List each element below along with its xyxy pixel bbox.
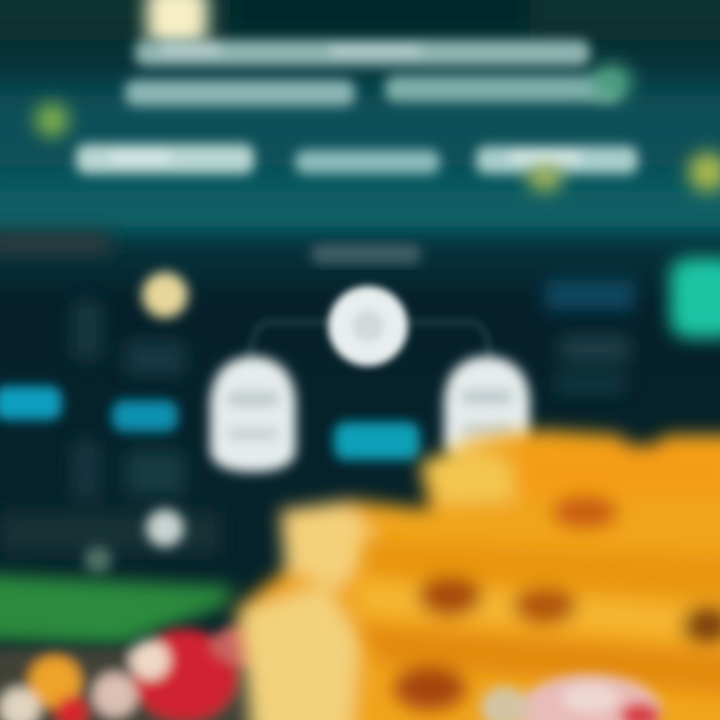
- header glow band: [0, 0, 720, 226]
- green field: [0, 574, 235, 646]
- title: blurred heading lines: [76, 40, 638, 174]
- right panel text: [545, 280, 635, 393]
- diagram right shield: [444, 356, 530, 470]
- waffle stack: [235, 430, 720, 720]
- left cyan labels: [0, 386, 178, 432]
- icon: lamp at top: [146, 0, 208, 46]
- header accents: green-yellow spots: [35, 64, 720, 192]
- waffle ridges and pockets: [360, 496, 720, 710]
- icon: mint green tile: [670, 258, 720, 338]
- cyan label center: [334, 422, 420, 460]
- strawberries and fruit: [0, 625, 279, 720]
- icon: small white dot: [84, 509, 184, 574]
- diagram left shield: [210, 356, 296, 472]
- strawberry bottom right: [481, 674, 662, 720]
- left panel: dark column: [0, 232, 220, 554]
- diagram heading: [312, 244, 420, 264]
- icon: yellow circle: [142, 272, 188, 318]
- diagram connectors: [250, 322, 490, 360]
- diagram top circle: [328, 286, 408, 366]
